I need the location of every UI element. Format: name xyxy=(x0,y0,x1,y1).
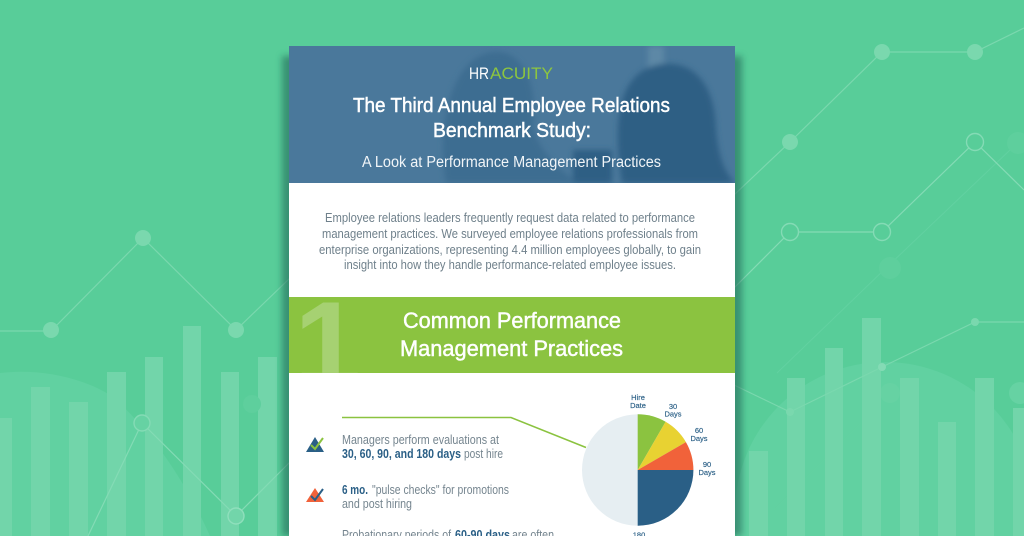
intro paragraph xyxy=(319,211,701,272)
infographic panel xyxy=(289,46,735,536)
icon: orange triangle check xyxy=(306,488,324,502)
bullet: evaluations: 30, 60, 90, and 180 days xyxy=(342,447,461,461)
intro paragraph: enterprise organizations, representing 4.4 million employees globally, to gain xyxy=(319,243,701,257)
logo: HR xyxy=(469,65,489,83)
bullet: pulse checks xyxy=(342,483,509,511)
background chart: left xyxy=(0,230,290,536)
pie labels: Days xyxy=(664,410,682,418)
section heading: Common Performance xyxy=(403,308,621,333)
pie labels: Days xyxy=(690,434,708,443)
pie labels: Hire xyxy=(631,393,645,402)
pie labels: Days xyxy=(698,468,716,477)
bullet: evaluations: post hire xyxy=(464,447,503,461)
bullet: pulse checks: "pulse checks" for promotions xyxy=(372,483,509,497)
pie labels: Date xyxy=(630,401,646,410)
intro paragraph: Employee relations leaders frequently request data related to performance xyxy=(325,211,695,225)
section heading: Management Practices xyxy=(400,336,623,361)
intro paragraph: management practices. We surveyed employee relations professionals from xyxy=(322,227,698,241)
section heading xyxy=(400,308,623,361)
pie labels: 90 xyxy=(703,460,711,469)
panel shadow xyxy=(282,56,742,536)
subtitle: A Look at Performance Management Practices xyxy=(362,154,661,171)
title: Benchmark Study: xyxy=(433,120,591,142)
section number: 1 xyxy=(294,277,361,411)
pie labels: 60 xyxy=(695,426,703,435)
title: The Third Annual Employee Relations xyxy=(353,95,670,117)
background chart: right xyxy=(734,28,1024,536)
bullet: pulse checks: 6 mo. xyxy=(342,483,368,497)
bullet: pulse checks: and post hiring xyxy=(342,497,412,511)
header with photo xyxy=(289,46,735,183)
logo: ACUITY xyxy=(490,65,553,83)
pie chart xyxy=(582,414,693,526)
pie labels: 30 xyxy=(669,402,677,411)
title xyxy=(353,95,670,142)
pie labels xyxy=(630,393,716,536)
intro paragraph: insight into how they handle performance-related employee issues. xyxy=(344,258,676,272)
bullet: evaluations: Managers perform evaluations at xyxy=(342,433,499,447)
icon: blue triangle check xyxy=(306,437,324,452)
bullet: evaluations xyxy=(342,433,503,461)
section banner xyxy=(289,297,735,373)
bullet: probationary periods xyxy=(342,528,554,536)
leader line xyxy=(342,418,586,448)
